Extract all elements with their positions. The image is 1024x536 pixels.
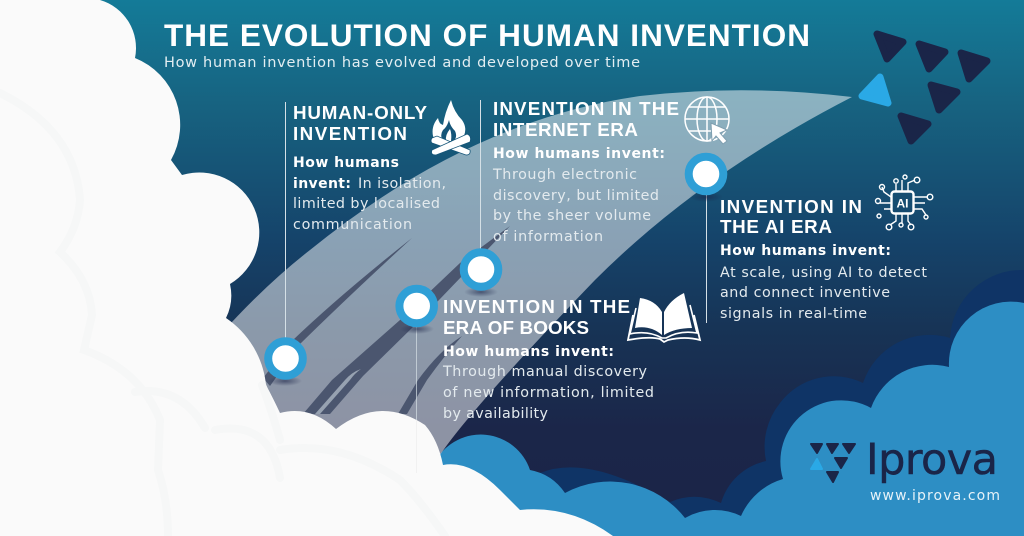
icon: open book <box>628 293 700 342</box>
white clouds <box>0 0 613 536</box>
title: THE EVOLUTION OF HUMAN INVENTION <box>164 17 810 53</box>
timeline marker: internet <box>464 252 498 297</box>
subtitle: How human invention has evolved and developed over time <box>164 55 640 71</box>
panel: invention in the internet era: How humans invent: <box>493 146 665 162</box>
panel: invention in the era of books: INVENTION IN THE <box>443 296 630 317</box>
icon: AI chip: AI <box>896 196 908 210</box>
panel: human-only invention <box>293 102 446 233</box>
panel: invention in the AI era <box>720 196 927 322</box>
panel: invention in the AI era: and connect inventive <box>720 285 890 301</box>
front blue clouds <box>420 302 1024 536</box>
panel: invention in the internet era: discovery, but limited <box>493 188 659 204</box>
panel: human-only invention: limited by localised <box>293 196 440 212</box>
panel: invention in the era of books <box>442 296 654 422</box>
panel: invention in the AI era: THE AI ERA <box>720 216 832 237</box>
timeline marker: AI <box>689 157 723 202</box>
company logo: Iprova <box>866 435 998 485</box>
panel: invention in the era of books: How humans invent: <box>443 344 614 360</box>
company logo: www.iprova.com <box>870 488 1000 504</box>
panel: invention in the era of books: by availability <box>443 406 549 422</box>
panel: invention in the internet era: by the sheer volume <box>493 208 651 224</box>
panel: human-only invention: HUMAN-ONLY <box>293 102 427 123</box>
panel: human-only invention: How humans <box>293 155 399 171</box>
panel: invention in the AI era: How humans invent: <box>720 243 891 259</box>
panel: invention in the AI era: INVENTION IN <box>720 196 862 217</box>
icon: campfire <box>431 100 471 155</box>
timeline marker: human-only <box>268 341 303 386</box>
panel: invention in the internet era: Through electronic <box>492 167 637 183</box>
icon: large triangle logo <box>862 34 987 141</box>
panel: invention in the era of books: ERA OF BOOKS <box>443 317 589 338</box>
panel: invention in the AI era: signals in real-time <box>720 306 867 322</box>
timeline marker: books <box>399 289 434 334</box>
panel: invention in the internet era: INTERNET ERA <box>493 119 638 140</box>
cloud shading <box>0 93 445 536</box>
panel: invention in the internet era: INVENTION IN THE <box>493 98 679 119</box>
dark streak lines <box>263 226 510 414</box>
light streak <box>220 90 852 470</box>
icon: AI chip <box>876 175 933 230</box>
icon: globe with cursor <box>685 97 729 144</box>
panel: invention in the internet era: of information <box>493 229 603 245</box>
panel: invention in the internet era <box>492 98 679 245</box>
light sliver in streak <box>315 369 361 414</box>
panel: human-only invention: invent: <box>293 176 351 192</box>
panel: invention in the AI era: At scale, using AI to detect <box>720 265 927 281</box>
company logo <box>811 435 1000 504</box>
back dark blue clouds <box>520 270 1024 536</box>
connector lines <box>286 100 706 340</box>
panel: invention in the era of books: Through manual discovery <box>442 364 648 380</box>
connector line: books <box>416 325 418 473</box>
panel: human-only invention: INVENTION <box>293 123 407 144</box>
panel: invention in the era of books: of new information, limited <box>443 385 654 401</box>
panel: human-only invention: communication <box>293 217 412 233</box>
panel: human-only invention: In isolation, <box>358 176 446 192</box>
